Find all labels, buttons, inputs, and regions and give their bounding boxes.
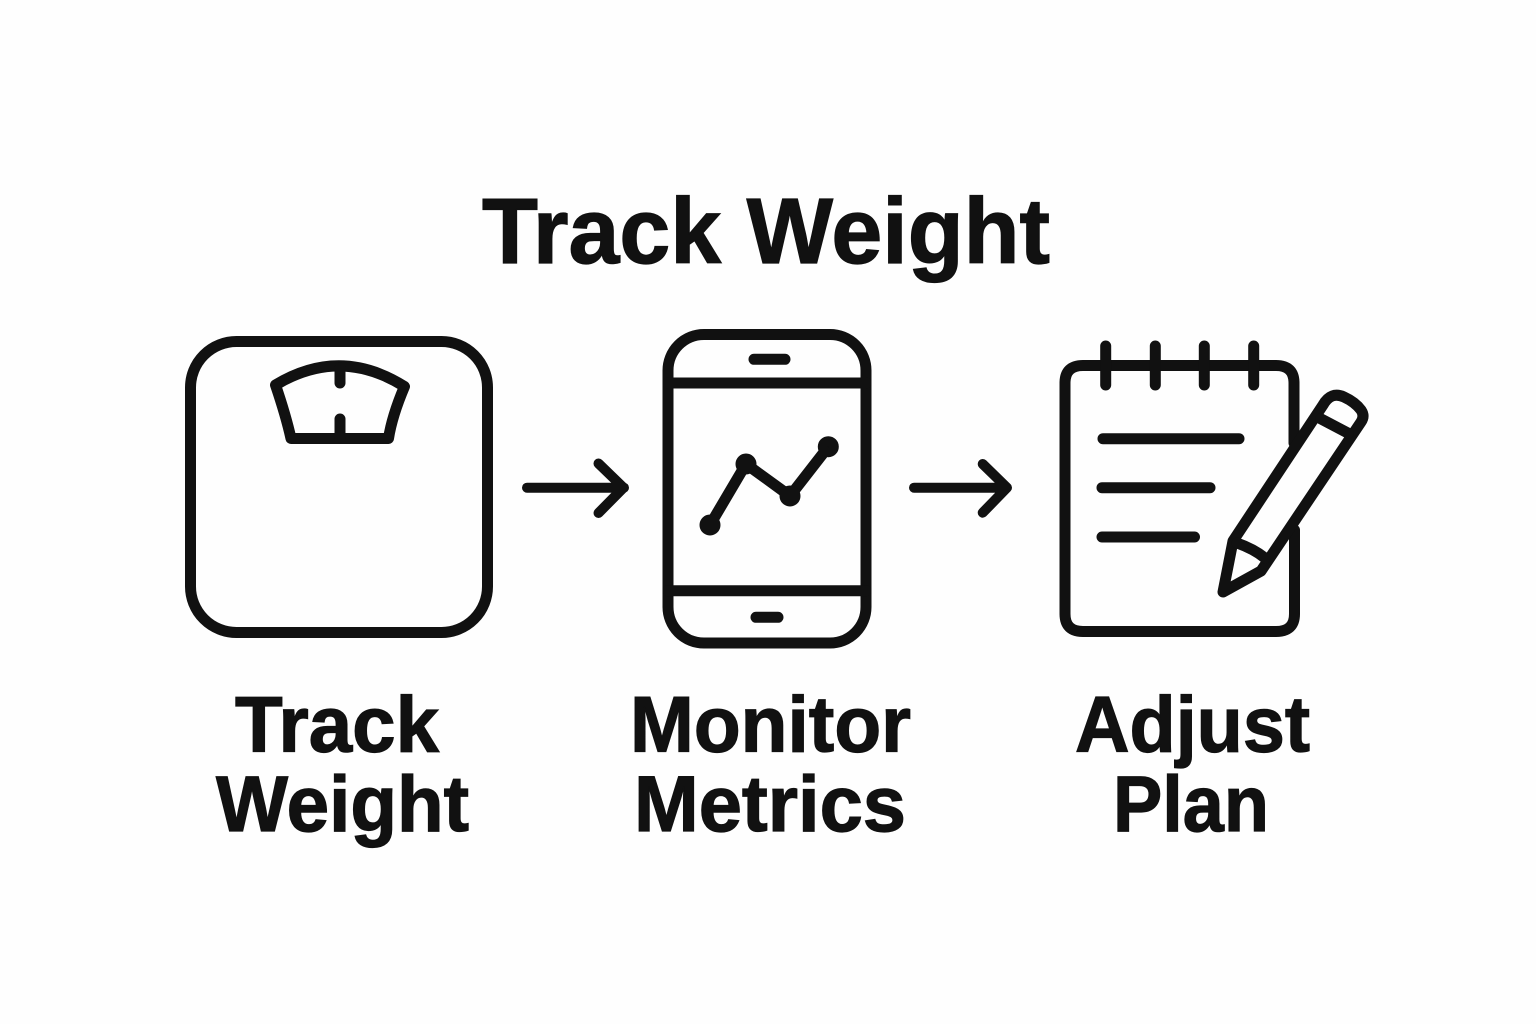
arrow: scale to phone xyxy=(527,464,624,513)
pencil xyxy=(1223,395,1363,592)
arrow: phone to notepad xyxy=(914,464,1007,513)
label: track weight: Track xyxy=(235,680,440,769)
icon: notepad with pencil xyxy=(1065,346,1363,632)
label: adjust plan: Adjust xyxy=(1075,680,1310,769)
label: monitor metrics: Metrics xyxy=(634,759,906,848)
label: track weight xyxy=(216,680,469,848)
label: adjust plan: Plan xyxy=(1113,759,1269,848)
icon: bathroom scale xyxy=(190,342,488,632)
label: track weight: Weight xyxy=(216,759,469,848)
label: adjust plan xyxy=(1075,680,1310,848)
label: monitor metrics xyxy=(630,680,911,848)
line chart on phone screen xyxy=(705,442,833,530)
label: monitor metrics: Monitor xyxy=(630,680,911,769)
title: Track Weight xyxy=(482,179,1050,283)
icon: smartphone with chart xyxy=(668,334,866,643)
